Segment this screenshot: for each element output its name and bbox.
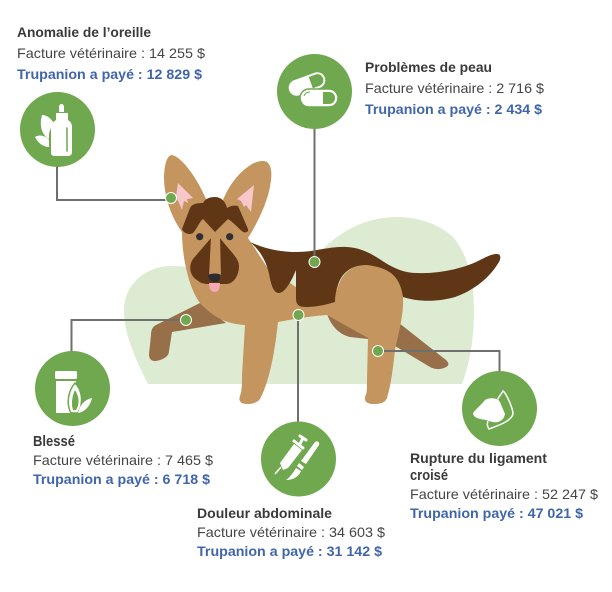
muzzle stripe: [209, 236, 221, 277]
ear inner left: [176, 183, 193, 210]
muzzle: [190, 236, 239, 284]
text: Douleur abdominale: Facture vétérinaire : 34 603 $: [197, 524, 385, 540]
connector lines: [57, 128, 500, 424]
nose: [208, 274, 221, 282]
text: Blessé: Blessé: [33, 434, 75, 450]
text: Blessé: [33, 434, 213, 487]
tongue: [209, 283, 220, 292]
ear inner right: [237, 185, 254, 212]
illustration: dog: [149, 155, 500, 404]
text: Douleur abdominale: Douleur abdominale: [197, 505, 332, 521]
icon: pills: [277, 54, 352, 129]
text: Anomalie de l'oreille: Trupanion a payé : 12 829 $: [17, 66, 202, 82]
text: Rupture du ligament croisé: croisé: [410, 468, 448, 484]
background blob: [124, 217, 474, 384]
text: Rupture du ligament croisé: Facture vétérinaire : 52 247 $: [410, 486, 598, 502]
text: Blessé: Trupanion a payé : 6 718 $: [33, 471, 210, 487]
text: Problèmes de peau: [365, 59, 544, 117]
text: Anomalie de l'oreille: Facture vétérinaire : 14 255 $: [17, 45, 205, 61]
text: Anomalie de l'oreille: Anomalie de l’oreille: [17, 24, 151, 40]
text: Rupture du ligament croisé: [410, 450, 598, 521]
text: Rupture du ligament croisé: Trupanion payé : 47 021 $: [410, 505, 583, 521]
text: Anomalie de l'oreille: [17, 24, 205, 82]
dark back and tail: [250, 242, 500, 307]
text: Douleur abdominale: Trupanion a payé : 31 142 $: [197, 543, 382, 559]
far rear leg: [327, 300, 448, 369]
dog body: [164, 155, 403, 404]
text: Problèmes de peau: Problèmes de peau: [365, 59, 492, 75]
text: Douleur abdominale: [197, 505, 385, 559]
eyes: [196, 233, 233, 240]
icon: syringe and scalpel: [261, 422, 336, 496]
text: Problèmes de peau: Trupanion a payé : 2 434 $: [365, 101, 542, 117]
icon: dropper bottle and leaves: [20, 92, 95, 167]
marker dots: [166, 192, 384, 356]
text: Blessé: Facture vétérinaire : 7 465 $: [33, 452, 213, 468]
icon: dog head with cone: [462, 371, 537, 446]
text: Rupture du ligament croisé: Rupture du ligament: [410, 450, 547, 466]
far front leg: [149, 303, 226, 361]
icon: jar and leaves: [35, 351, 110, 426]
text: Problèmes de peau: Facture vétérinaire : 2 716 $: [365, 80, 544, 96]
head markings: [182, 197, 248, 234]
